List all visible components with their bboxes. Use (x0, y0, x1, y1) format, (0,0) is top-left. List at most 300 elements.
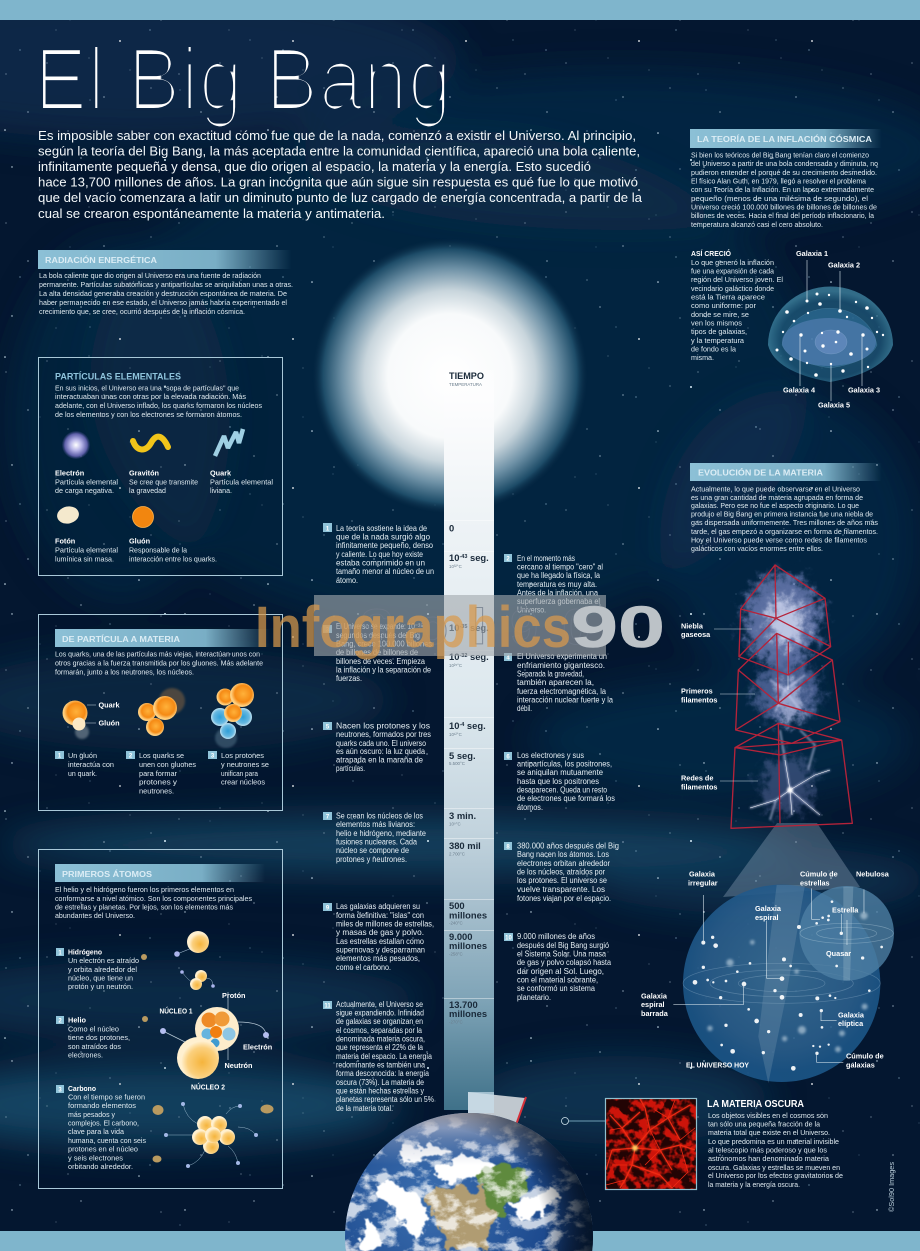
steps captions: y neutrones se (221, 760, 269, 769)
timeline column: 5 seg. (449, 750, 476, 761)
step 2 text: superfuerza gobernaba el (517, 597, 600, 606)
cube: niebla gaseosa (739, 565, 831, 675)
timeline text blocks: 6 (506, 754, 510, 760)
universe labels (641, 870, 890, 1070)
atom list: hidrógeno, helio, carbono: 3 (58, 1088, 62, 1094)
panel: partículas elementales: PARTÍCULAS ELEMENTALES (55, 372, 181, 382)
panel: partículas elementales: interactuaban unas con otras por la elevada radiación. Más (55, 392, 246, 401)
bottom band (0, 1231, 920, 1251)
step 11 text: sigue expandiendo. Infinidad (336, 1008, 424, 1018)
panel: evolución de la materia: tarde, el gas empezó a organizarse en forma de filamentos. (691, 527, 878, 536)
universe labels: Nebulosa (856, 870, 890, 878)
atom list: hidrógeno, helio, carbono: humana, cuenta con seis (68, 1136, 146, 1145)
step 8 text: electrones orbitan alrededor (517, 859, 610, 868)
step 11 text: denominada materia oscura, (336, 1034, 425, 1044)
dark matter text: Lo que predomina es un material invisible (708, 1137, 839, 1146)
atom list: hidrógeno, helio, carbono: Carbono (68, 1084, 97, 1093)
step 10 text: de gas y polvo colapsó hasta (517, 958, 611, 967)
particle descriptions: de carga negativa. (55, 486, 114, 495)
atom list: hidrógeno, helio, carbono: más pesados y (68, 1110, 115, 1119)
step 2 illustration (138, 688, 185, 736)
timeline column: 10 (449, 651, 459, 662)
atom list: hidrógeno, helio, carbono: 1 (58, 950, 62, 956)
dark matter text: Los objetos visibles en el cosmos son (708, 1111, 828, 1120)
intro text: que del vacío comenzara a latir un diminuto punto de luz cargado de energía concentrada, a partir de la (38, 190, 643, 205)
step 2 text: que ha llegado la física, la (517, 571, 600, 580)
timeline text blocks: 7 (326, 814, 330, 820)
step 2 text: temperatura es muy alta. (517, 580, 597, 589)
steps captions: Los protones (221, 751, 264, 760)
particle descriptions: Partícula elemental (55, 478, 118, 486)
step 2 text: cercano al tiempo "cero" al (517, 562, 603, 572)
timeline column: -270°C (449, 1020, 463, 1024)
timeline column: 3 min. (449, 810, 476, 821)
particle labels: Electrón (55, 468, 84, 478)
atom list: hidrógeno, helio, carbono: formando elementos (68, 1101, 136, 1110)
universe labels: Cúmulo de (800, 870, 838, 878)
step 11 text (336, 1000, 434, 1113)
step 10 text: 9.000 millones de años (517, 932, 595, 941)
particle descriptions: Partícula elemental (55, 546, 118, 554)
step 5 text (336, 722, 431, 773)
step 1 text (336, 524, 434, 585)
step 5 text: Nacen los protones y los (336, 722, 430, 730)
step 5 text: neutrones, formados por tres (336, 730, 431, 739)
universe labels: Quasar (826, 949, 851, 958)
panel: evolución de la materia: Hoy el Universo puede verse como redes de filamentos (691, 536, 867, 544)
step 4 text: El Universo experimenta un (517, 652, 607, 661)
panel: la teoría de la inflación cósmica: temperatura alcanzó casi el cero absoluto. (691, 220, 823, 229)
intro text: infinitamente pequeña y densa, que dio origen al espacio, la materia y la energía. Esto sucedió (38, 159, 591, 174)
step 6 text: hasta que los positrones (517, 777, 599, 786)
atom labels: NÚCLEO 1 (160, 1006, 192, 1016)
dark matter text: la materia y la energía oscura. (708, 1180, 800, 1189)
earth wedge marker (468, 1092, 526, 1125)
panel: radiación energética: La alta densidad generaba creación y destrucción espontánea de materia. De (39, 289, 287, 298)
atom labels (160, 991, 272, 1092)
step 6 text: se aniquilan mutuamente (517, 768, 604, 777)
dark matter image (606, 1098, 696, 1190)
step 10 text: el Sistema Solar. Una masa (517, 950, 606, 958)
step 8 text: vuelve transparente. Los (517, 885, 605, 894)
steps captions: 1 (58, 754, 62, 760)
step 1 text: La teoría sostiene la idea de (336, 524, 427, 533)
step 10 text: planetario. (517, 993, 551, 1002)
atom: helio (180, 970, 215, 990)
timeline column: 10⁹°C (449, 822, 461, 826)
step 3 text: segundos después del Big (336, 631, 420, 640)
así creció text: como uniforme: por (691, 301, 757, 310)
step 6 text: desaparecen. Queda un resto (517, 786, 607, 794)
así creció text: de fondo es la (691, 344, 737, 354)
chart: el universo hoy (641, 870, 894, 1083)
timeline text blocks: 1 (326, 526, 330, 532)
step 3 text: fuerzas. (336, 674, 362, 683)
panel: la teoría de la inflación cósmica: pudieron entender el porqué de su crecimiento desmedido. (691, 168, 877, 177)
steps captions: Un gluón (68, 751, 97, 760)
timeline column: 9.000 (449, 931, 472, 942)
universe labels: Galaxia (838, 1010, 865, 1020)
particle labels (55, 468, 232, 546)
particle descriptions: Se cree que transmite (129, 478, 198, 486)
step 11 text: forma desconocida: la energía (336, 1069, 429, 1078)
atom list: hidrógeno, helio, carbono: Con el tiempo se fueron (68, 1092, 145, 1102)
watermark: Infographics (255, 595, 571, 660)
atom list: hidrógeno, helio, carbono: complejos. El carbono, (68, 1118, 139, 1128)
timeline text blocks: 4 (506, 656, 510, 662)
step 4 text: débil. (517, 704, 532, 713)
panel: la teoría de la inflación cósmica: Si bien los teóricos del Big Bang tenían claro el comienzo (691, 150, 869, 160)
steps captions: interactúa con (68, 760, 114, 769)
step 1 illustration: Quark (98, 700, 121, 710)
panel: radiación energética: RADIACIÓN ENERGÉTICA (45, 254, 157, 265)
step 11 text: Actualmente, el Universo se (336, 1000, 423, 1009)
atom list: hidrógeno, helio, carbono: y seis electrones (68, 1154, 123, 1162)
timeline column: 500 (449, 900, 465, 911)
así creció text: vecindario galáctico donde (691, 284, 774, 293)
icon: quark (215, 429, 243, 456)
steps captions: Los quarks se (139, 751, 184, 760)
atom list: hidrógeno, helio, carbono: Helio (68, 1016, 87, 1024)
panel: de partícula a materia (38, 614, 282, 810)
universe labels: Galaxia (689, 870, 716, 878)
step 11 text: redominante es también una (336, 1060, 425, 1070)
step 2 text (517, 554, 603, 614)
panel: radiación energética: haber permanecido en ese estado, el Universo jamás habría experimentado el (39, 298, 287, 307)
step 5 text: es aún oscuro: la luz queda (336, 747, 426, 756)
particle descriptions: la gravedad (129, 486, 166, 495)
así creció text: donde se mire, se (691, 310, 749, 319)
timeline text blocks: 8 (506, 844, 510, 850)
timeline text blocks: 3 (326, 628, 330, 634)
atom list: hidrógeno, helio, carbono: tiene dos protones, (68, 1033, 130, 1042)
step 1 text: infinitamente pequeño, denso (336, 541, 434, 550)
timeline column: 10¹²°C (449, 732, 462, 737)
panel: partículas elementales: En sus inicios, el Universo era una "sopa de partículas" que (55, 384, 239, 392)
particle descriptions: Partícula elemental (210, 478, 273, 486)
step 7 text: núcleo se compone de (336, 846, 409, 855)
intro text (38, 128, 643, 221)
particle labels: Gluón (129, 536, 150, 546)
cube: redes de filamentos (731, 723, 852, 828)
step 9 text: Las estrellas estallan como (336, 937, 424, 946)
dark matter text: materia total que existe en el Universo. (708, 1128, 830, 1137)
evolution labels: filamentos (681, 696, 718, 704)
steps captions: 2 (129, 754, 133, 760)
steps captions: neutrones. (139, 786, 174, 796)
panel: la teoría de la inflación cósmica: LA TEORÍA DE LA INFLACIÓN CÓSMICA (697, 133, 872, 144)
steps captions: un quark. (68, 769, 97, 778)
step 5 text: atrapada en la maraña de (336, 756, 424, 764)
atom labels: Protón (222, 991, 246, 1000)
timeline column: millones (449, 940, 487, 951)
step 4 text: enfriamiento gigantesco. (517, 661, 605, 670)
particle descriptions: interacción entre los quarks. (129, 554, 217, 564)
panel: primeros átomos (38, 850, 282, 1188)
step 1 illustration: Gluón (98, 718, 120, 728)
step 7 text: helio e hidrógeno, mediante (336, 829, 426, 838)
step 11 text: materia del espacio. La energía (336, 1052, 432, 1061)
panel: la teoría de la inflación cósmica: El físico Alan Guth, en 1979, llegó a resolver el problema (691, 176, 867, 186)
dark matter text (707, 1099, 843, 1189)
particle labels: Fotón (55, 536, 75, 546)
timeline column: 10 (449, 622, 459, 633)
panel: primeros átomos: PRIMEROS ÁTOMOS (62, 869, 152, 879)
timeline column: 2.700°C (449, 852, 465, 856)
step 5 text: partículas. (336, 764, 365, 773)
step 9 text: como el carbono. (336, 963, 391, 972)
step 11 text: el cosmos, separadas por la (336, 1026, 422, 1035)
dark matter text: al telescopio más poderoso y que los (708, 1146, 827, 1154)
evolution labels (681, 622, 718, 792)
dome labels: Galaxia 3 (848, 386, 880, 394)
step 4 text: también aparecen la, (517, 678, 594, 687)
intro text: hace 13,700 millones de años. La gran incógnita que aún sigue sin respuesta es qué fue lo que motivó (38, 174, 638, 190)
steps captions: protones y (139, 778, 177, 786)
panel: la teoría de la inflación cósmica: billones de veces. Hacia el final del período inflacionario, la (691, 211, 875, 220)
atom list: hidrógeno, helio, carbono: son atraídos dos (68, 1042, 121, 1051)
timeline column: -35 (459, 624, 467, 630)
panel: primeros átomos: de estrellas y planetas. Por lejos, son los elementos más (55, 902, 233, 912)
step 3 text: billones de veces. Empieza (336, 657, 425, 666)
panel: la teoría de la inflación cósmica: pequeño (menos de una milésima de segundo), el (691, 194, 868, 203)
icon: electrón (62, 431, 90, 459)
universe labels: estrellas (800, 878, 830, 888)
timeline column: seg. (467, 622, 489, 633)
atom labels: Neutrón (224, 1061, 252, 1070)
top band (0, 0, 920, 20)
timeline column: TEMPERATURA (449, 382, 482, 387)
dark matter text: tan sólo una pequeña fracción de la (708, 1120, 821, 1128)
icon: gravitón (133, 437, 168, 450)
dark matter text: el Universo por los efectos gravitatorios de (708, 1171, 843, 1180)
timeline text blocks (323, 523, 619, 1113)
timeline text blocks: 2 (506, 556, 510, 562)
atom list: hidrógeno, helio, carbono: 2 (58, 1018, 62, 1024)
timeline column: 5.500°C (449, 761, 465, 766)
step 11 text: de galaxias se organizan en (336, 1017, 423, 1026)
panel: evolución de la materia: produjo el Big Bang en primera instancia fue una niebla de (691, 510, 873, 518)
step 11 text: que representa el 22% de la (336, 1043, 423, 1052)
timeline column: -4 (459, 722, 465, 728)
panel: primeros átomos: conformarse a nivel atómico. Son los componentes principales (55, 894, 252, 903)
step 9 text: forma definitiva: "islas" con (336, 911, 424, 920)
así creció text: ASÍ CRECIÓ (691, 249, 731, 258)
evolution labels: Niebla (681, 622, 704, 630)
step 8 text: fotones viajan por el espacio. (517, 894, 611, 903)
step 7 text (336, 812, 426, 864)
timeline column: 13.700 (449, 999, 478, 1010)
panel: la teoría de la inflación cósmica: Universo creció 100.000 billones de billones de billones de (691, 202, 877, 212)
big bang glowing ball (312, 238, 588, 514)
watermark: Sol90 (360, 599, 590, 655)
timeline column: 0 (449, 522, 454, 534)
step 8 text: de los núcleos, atraídos por (517, 868, 605, 876)
step 9 text: elementos más pesados, (336, 954, 420, 963)
atom: hidrógeno (174, 931, 209, 957)
step 3 text: Bang, crece 100.000 billones (336, 640, 432, 648)
panel: primeros átomos: abundantes del Universo. (55, 911, 135, 920)
icon: fotón (55, 504, 81, 526)
timeline column: millones (449, 1008, 487, 1019)
title: El Big Bang (34, 30, 452, 128)
step 1 text: tamaño menor al núcleo de un (336, 567, 434, 576)
timeline column: 380 mil (449, 840, 481, 851)
step 4 text: interacción nuclear fuerte y la (517, 696, 614, 704)
timeline column: 10 (449, 552, 459, 563)
step 9 text: miles de millones de estrellas, (336, 920, 434, 928)
evolution labels: Redes de (681, 774, 713, 782)
atom list: hidrógeno, helio, carbono: Un electrón es atraído (68, 956, 139, 965)
timeline column: millones (449, 910, 487, 920)
universe labels: Galaxia (755, 904, 782, 913)
panel: evolución de la materia: EVOLUCIÓN DE LA MATERIA (698, 466, 823, 478)
particle descriptions: lumínica sin masa. (55, 554, 114, 564)
steps captions: 3 (211, 754, 215, 760)
panel: partículas elementales (38, 358, 282, 576)
panel: evolución de la materia: es una gran cantidad de materia agrupada en forma de (691, 493, 863, 502)
atom list: hidrógeno, helio, carbono: electrones. (68, 1050, 103, 1060)
panel: evolución de la materia: gas dispersada uniformemente. Tres millones de años más (691, 518, 878, 527)
timeline column: seg. (467, 651, 489, 662)
timeline column: -43 (459, 554, 467, 560)
panel: la teoría de la inflación cósmica (690, 129, 893, 410)
universe labels: galaxias (846, 1060, 875, 1070)
step 6 text: Los electrones y sus (517, 751, 584, 760)
timeline text blocks: 5 (326, 724, 330, 730)
universe labels: barrada (641, 1009, 669, 1018)
step 6 text: de electrones que formará los (517, 794, 615, 803)
step 1 text: estaba comprimido en un (336, 558, 425, 568)
step 6 text (517, 751, 615, 812)
step 10 text: después del Big Bang surgió (517, 941, 609, 950)
steps captions (55, 751, 269, 796)
particle descriptions (55, 478, 273, 564)
step 1 text: que de la nada surgió algo (336, 532, 431, 542)
step 8 text: Bang nacen los átomos. Los (517, 850, 609, 859)
intro text: Es imposible saber con exactitud cómo fue que de la nada, comenzó a existir el Universo. Al principio, (38, 128, 636, 143)
step 6 text: antipartículas, los positrones, (517, 760, 612, 768)
panel: partículas elementales: de los elementos y con los electrones se formaron átomos. (55, 410, 242, 419)
step 7 text: protones y neutrones. (336, 855, 407, 864)
step 3 text: la inflación y la separación de (336, 666, 431, 674)
universe labels: EL UNIVERSO HOY (686, 1060, 749, 1070)
atom list: hidrógeno, helio, carbono: y orbita alrededor del (68, 965, 137, 974)
panel: evolución de la materia: galácticos con vacíos enormes entre ellos. (691, 544, 823, 553)
así creció text: misma. (691, 353, 714, 362)
intro text: cual se crearon espontáneamente la materia y antimateria. (38, 206, 385, 221)
chart: dome of galaxies (768, 260, 893, 401)
así creció text: tipos de galaxias, (691, 327, 747, 336)
así creció text: y la temperatura (691, 336, 745, 345)
atom list: hidrógeno, helio, carbono: protones en el núcleo (68, 1144, 138, 1154)
step 8 text: 380.000 años después del Big (517, 842, 619, 850)
intro text: según la teoría del Big Bang, la más aceptada entre la comunidad científica, apareció una bola caliente, (38, 144, 640, 158)
así creció text (691, 249, 783, 362)
atom labels: NÚCLEO 2 (191, 1082, 225, 1092)
universe labels: irregular (688, 878, 718, 888)
atom list: hidrógeno, helio, carbono: Hidrógeno (68, 948, 103, 956)
step 9 text (336, 902, 434, 972)
step 10 text (517, 932, 611, 1002)
step 9 text: supernovas y desparraman (336, 946, 425, 954)
evolution labels: Primeros (681, 686, 713, 696)
así creció text: Lo que generó la inflación (691, 258, 774, 267)
step 4 text: fuerza electromagnética, la (517, 687, 606, 696)
step 9 text: Las galaxias adquieren su (336, 902, 420, 911)
dark matter text: LA MATERIA OSCURA (707, 1099, 804, 1110)
timeline column: 10²⁵°C (449, 663, 462, 668)
step 9 text: y masas de gas y polvo. (336, 928, 424, 937)
dome labels: Galaxia 5 (818, 400, 850, 410)
time labels: TIEMPO (449, 371, 484, 381)
panel: de partícula a materia: otros gracias a la fuerza transmitida por los gluones. Más adelante (55, 658, 263, 668)
timeline text blocks: 11 (324, 1004, 331, 1010)
atom list: hidrógeno, helio, carbono: clave para la vida (68, 1127, 125, 1136)
dark matter text: astrónomos han denominado materia (708, 1154, 830, 1163)
atom: carbono (141, 954, 274, 1168)
universe labels: elíptica (838, 1019, 864, 1028)
atom list: hidrógeno, helio, carbono: Como el núcleo (68, 1024, 119, 1034)
timeline column: -240°C (449, 920, 463, 926)
step 2 text: En el momento más (517, 554, 575, 563)
earth (345, 1113, 593, 1251)
atom labels: Electrón (243, 1042, 272, 1052)
panel: de partícula a materia: DE PARTÍCULA A MATERIA (62, 634, 180, 644)
step 11 text: oscura (73%). La materia de (336, 1078, 424, 1087)
particle descriptions: liviana. (210, 486, 232, 495)
dome labels: Galaxia 4 (783, 386, 816, 394)
step 11 text: planetas representa sólo un 5% (336, 1095, 434, 1104)
step 6 text: átomos. (517, 803, 543, 812)
step 4 text (517, 652, 614, 713)
universe labels: Estrella (832, 906, 859, 914)
chart: evolution cubes with matter (714, 565, 852, 828)
timeline column: 10 (449, 720, 459, 731)
particle labels: Gravitón (129, 468, 159, 478)
dome labels: Galaxia 1 (796, 249, 828, 258)
timeline column: 10³²°C (449, 564, 462, 569)
atom list: hidrógeno, helio, carbono: núcleo, que tiene un (68, 974, 133, 982)
step 7 text: Se crean los núcleos de los (336, 812, 423, 820)
step 1 text: átomo. (336, 576, 358, 585)
credit: ©Sol90 Images (888, 1161, 896, 1212)
steps captions: unen con gluones (139, 760, 196, 769)
timeline column: -32 (459, 653, 467, 659)
cube: primeros filamentos (736, 633, 840, 743)
step 3 illustration (211, 683, 254, 748)
panel: evolución de la materia: galaxias. Pero ese no fue el aspecto originario. Lo que (691, 501, 859, 510)
step 7 text: fusiones nucleares. Cada (336, 838, 417, 846)
step 1 illustration (62, 700, 121, 739)
step 10 text: con el material sobrante, (517, 976, 598, 984)
panel: de partícula a materia: Los quarks, una de las partículas más viejas, interactúan unos con (55, 650, 260, 658)
universe labels: espiral (755, 913, 779, 922)
step 11 text: de la materia total. (336, 1104, 393, 1113)
step 5 text: quarks cada uno. El universo (336, 739, 426, 748)
panel: evolución de la materia: Actualmente, lo que puede observarse en el Universo (691, 484, 860, 494)
step 2 text: Antes de la inflación, una (517, 588, 598, 598)
panel: radiación energética: La bola caliente que dio origen al Universo era una fuente de radiación (39, 271, 261, 280)
panel: evolución de la materia (690, 463, 882, 553)
universe labels: Cúmulo de (846, 1052, 884, 1060)
universe labels: espiral (641, 1000, 665, 1009)
universe labels: Galaxia (641, 992, 668, 1000)
watermark: 90 (571, 595, 665, 660)
atom: núcleos ampliados (160, 992, 269, 1079)
atom list: hidrógeno, helio, carbono: protón y un neutrón. (68, 982, 133, 991)
timeline text blocks: 10 (505, 936, 512, 942)
